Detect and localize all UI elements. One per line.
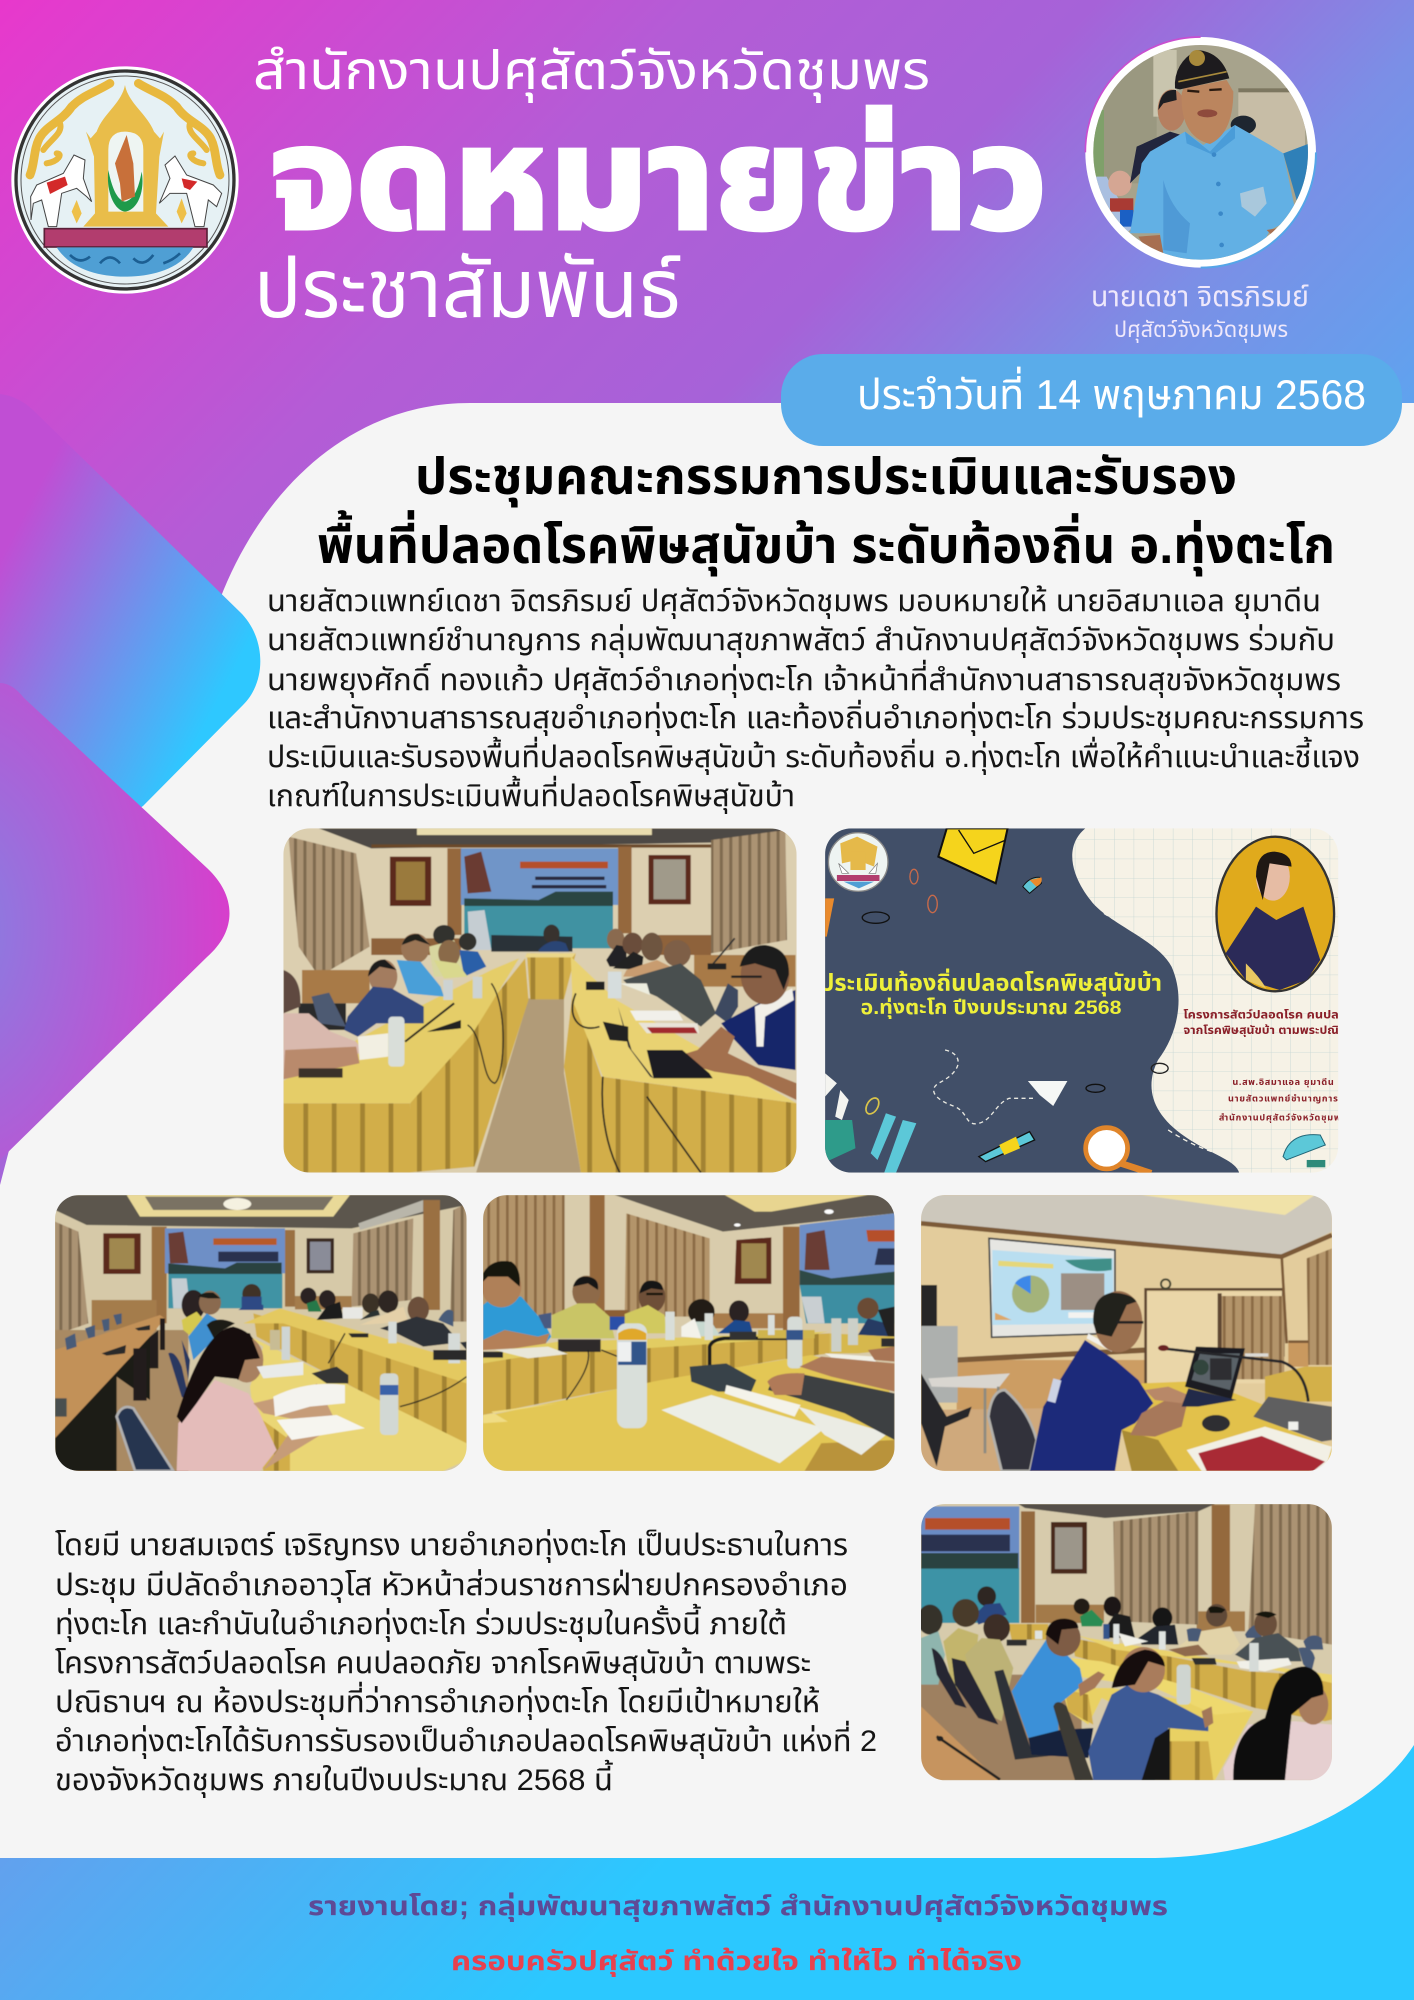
- body paragraph 2: ของจังหวัดชุมพร ภายในปีงบประมาณ 2568 นี้: [55, 1759, 613, 1798]
- slide project labels: จากโรคพิษสุนัขบ้า ตามพระปณิ: [1183, 1023, 1339, 1037]
- heading: office name: สำนักงานปศุสัตว์จังหวัดชุมพร: [253, 41, 930, 103]
- banner: [165, 1228, 285, 1273]
- slide project labels: สำนักงานปศุสัตว์จังหวัดชุมพ: [1219, 1113, 1341, 1123]
- slide title: ประเมินท้องถิ่นปลอดโรคพิษสุนัขบ้า: [819, 968, 1162, 997]
- body paragraph 1: นายสัตวแพทย์ชำนาญการ กลุ่มพัฒนาสุขภาพสัตว์ สำนักงานปศุสัตว์จังหวัดชุมพร ร่วมกับ: [267, 624, 1335, 658]
- near table: [1062, 1688, 1253, 1780]
- article heading: พื้นที่ปลอดโรคพิษสุนัขบ้า ระดับท้องถิ่น อ.ทุ่งตะโก: [317, 510, 1335, 576]
- decorative chevron: lower magenta: [0, 683, 230, 1160]
- photo: meeting from side: [915, 1498, 1340, 1788]
- body paragraph 2: โครงการสัตว์ปลอดโรค คนปลอดภัย จากโรคพิษสุนัขบ้า ตามพระ: [55, 1647, 811, 1681]
- framed portrait: [735, 1237, 771, 1284]
- floor: [921, 1675, 1082, 1780]
- right curtain: [711, 830, 787, 953]
- slide dark shape: [825, 828, 1239, 1173]
- laptop: [1185, 1347, 1245, 1399]
- photo: room view with woman reading: [50, 1190, 475, 1480]
- heading: public relations: ประชาสัมพันธ์: [254, 244, 681, 335]
- body paragraph 1: เกณฑ์ในการประเมินพื้นที่ปลอดโรคพิษสุนัขบ้า: [267, 775, 795, 814]
- floor: [476, 998, 581, 1173]
- body paragraph 1: ประเมินและรับรองพื้นที่ปลอดโรคพิษสุนัขบ้า ระดับท้องถิ่น อ.ทุ่งตะโก เพื่อให้คำแนะนำและชี้แจง: [267, 736, 1360, 775]
- date pill: [781, 354, 1402, 446]
- body paragraph 1: นายพยุงศักดิ์ ทองแก้ว ปศุสัตว์อำเภอทุ่งตะโก เจ้าหน้าที่สำนักงานสาธารณสุขจังหวัดชุมพร: [267, 659, 1341, 698]
- slide portrait oval: [1216, 837, 1334, 991]
- far table people: [1074, 1598, 1090, 1614]
- papers bottle devices: [273, 1384, 345, 1417]
- photo: presentation title slide: [819, 820, 1350, 1180]
- heading: newsletter: จดหมายข่าว: [270, 100, 1047, 259]
- footer credit: รายงานโดย; กลุ่มพัฒนาสุขภาพสัตว์ สำนักงานปศุสัตว์จังหวัดชุมพร: [308, 1891, 1168, 1922]
- body paragraph 2: อำเภอทุ่งตะโกได้รับการรับรองเป็นอำเภอปลอดโรคพิษสุนัขบ้า แห่งที่ 2: [55, 1720, 877, 1759]
- papers and bottles: [1237, 1658, 1292, 1671]
- body paragraph 1: [267, 585, 1364, 814]
- door: [1147, 1292, 1283, 1383]
- slide title: อ.ทุ่งตะโก ปีงบประมาณ 2568: [861, 997, 1122, 1019]
- floor and wood table: [55, 1330, 188, 1473]
- emblem flourishes right: [138, 83, 220, 175]
- emblem base: [44, 229, 207, 247]
- man in blue shirt: [1012, 1636, 1083, 1738]
- article heading: ประชุมคณะกรรมการประเมินและรับรอง: [415, 448, 1237, 507]
- right curtain: [1307, 1248, 1332, 1365]
- left table: [409, 958, 528, 1173]
- left side people: [182, 1290, 205, 1320]
- icon: department emblem: [11, 66, 239, 294]
- slide envelope: [938, 828, 1008, 883]
- body paragraph 2: ปณิธานฯ ณ ห้องประชุมที่ว่าการอำเภอทุ่งตะโก โดยมีเป้าหมายให้: [55, 1681, 820, 1720]
- slide stationery: [934, 1050, 1036, 1124]
- papers and bottles: [358, 1033, 388, 1060]
- body paragraph 2: ประชุม มีปลัดอำเภออาวุโส หัวหน้าส่วนราชการฝ่ายปกครองอำเภอ: [55, 1569, 848, 1603]
- woman in floral blouse: [177, 1380, 277, 1471]
- curtains: [483, 1195, 565, 1315]
- slide dashed trails: [1104, 913, 1217, 1153]
- yellow table near: [483, 1355, 895, 1471]
- yellow table far: [483, 1333, 830, 1415]
- far table: [527, 953, 576, 999]
- slide emblem: [828, 833, 888, 891]
- laptop: [618, 1007, 713, 1078]
- body paragraph 2: โดยมี นายสมเจตร์ เจริญทรง นายอำเภอทุ่งตะโก เป็นประธานในการ: [55, 1529, 848, 1563]
- frame: [1051, 1522, 1087, 1574]
- curtains: [1113, 1511, 1198, 1625]
- wood lower wall: [957, 1360, 1150, 1410]
- slide project labels: น.สพ.อิสมาแอล ยุมาดีน: [1232, 1077, 1334, 1087]
- left curtain: [289, 837, 370, 977]
- officer name: นายเดชา จิตรภิรมย์: [1091, 281, 1309, 313]
- photo: meeting room long view: [275, 820, 805, 1180]
- left seated people: [977, 1586, 996, 1606]
- officer position: ปศุสัตว์จังหวัดชุมพร: [1114, 317, 1288, 343]
- ceiling: [921, 1195, 1332, 1255]
- far table: [1008, 1624, 1048, 1640]
- decorative chevron: upper blue: [0, 394, 260, 900]
- photo: speaker with laptop and projector: [915, 1190, 1340, 1480]
- man with laptop: [721, 990, 796, 1070]
- chair foreground: [1053, 1702, 1093, 1780]
- left seated people: [312, 993, 346, 1027]
- microphones: [558, 1339, 601, 1352]
- body paragraph 2: [55, 1529, 877, 1798]
- banner: [921, 1506, 1019, 1570]
- seated people at far table: [242, 1284, 261, 1304]
- red folder: [1187, 1427, 1332, 1471]
- side table right: [1265, 1367, 1332, 1402]
- left cabinet: [921, 1285, 937, 1327]
- emblem flourishes left: [30, 83, 110, 175]
- woman in blue cardigan: [1088, 1685, 1208, 1780]
- banner: [800, 1213, 895, 1285]
- emblem animals: [31, 155, 92, 227]
- slide title: [819, 968, 1162, 1019]
- portrait: provincial livestock officer: [1085, 37, 1316, 268]
- body paragraph 1: นายสัตวแพทย์เดชา จิตรภิรมย์ ปศุสัตว์จังหวัดชุมพร มอบหมายให้ นายอิสมาแอล ยุมาดีน: [267, 585, 1321, 619]
- papers: [495, 1347, 568, 1358]
- emblem shrine: [83, 85, 168, 227]
- bottles: [617, 1323, 647, 1428]
- ceiling: [615, 1195, 895, 1232]
- framed portraits: [390, 857, 431, 906]
- back row people: [483, 1293, 551, 1348]
- projector screen: [989, 1238, 1115, 1337]
- slide project labels: โครงการสัตว์ปลอดโรค คนปล: [1183, 1008, 1339, 1022]
- photo: close view of table and attendees: [478, 1190, 903, 1480]
- arm foreground: [768, 1373, 895, 1440]
- floor: [921, 1408, 1045, 1471]
- curtains: [55, 1222, 88, 1335]
- mic base: [1253, 1397, 1332, 1442]
- yellow table: [1122, 1382, 1332, 1471]
- date text: ประจำวันที่ 14 พฤษภาคม 2568: [857, 366, 1366, 418]
- slide project labels: [1183, 1008, 1341, 1123]
- man in navy shirt: [1030, 1340, 1153, 1471]
- right table: [564, 993, 613, 1173]
- framed portraits: [103, 1233, 141, 1274]
- article heading: [317, 448, 1335, 576]
- far and right people: [543, 925, 560, 943]
- mouse: [1202, 1415, 1230, 1432]
- slide project labels: นายสัตวแพทย์ชำนาญการ: [1228, 1094, 1338, 1104]
- microphone: [1162, 1348, 1308, 1402]
- body paragraph 1: และสำนักงานสาธารณสุขอำเภอทุ่งตะโก และท้องถิ่นอำเภอทุ่งตะโก ร่วมประชุมคณะกรรมการ: [267, 699, 1364, 736]
- banner: [461, 848, 618, 905]
- footer slogan: ครอบครัวปศุสัตว์ ทำด้วยใจ ทำให้ไว ทำได้จริง: [451, 1946, 1022, 1977]
- body paragraph 2: ทุ่งตะโก และกำนันในอำเภอทุ่งตะโก ร่วมประชุมในครั้งนี้ ภายใต้: [55, 1603, 787, 1642]
- woman foreground with ponytail: [1223, 1721, 1332, 1780]
- chair: [988, 1390, 1037, 1471]
- yellow table: [253, 1313, 467, 1447]
- panel: main content sheet: [0, 403, 1414, 1858]
